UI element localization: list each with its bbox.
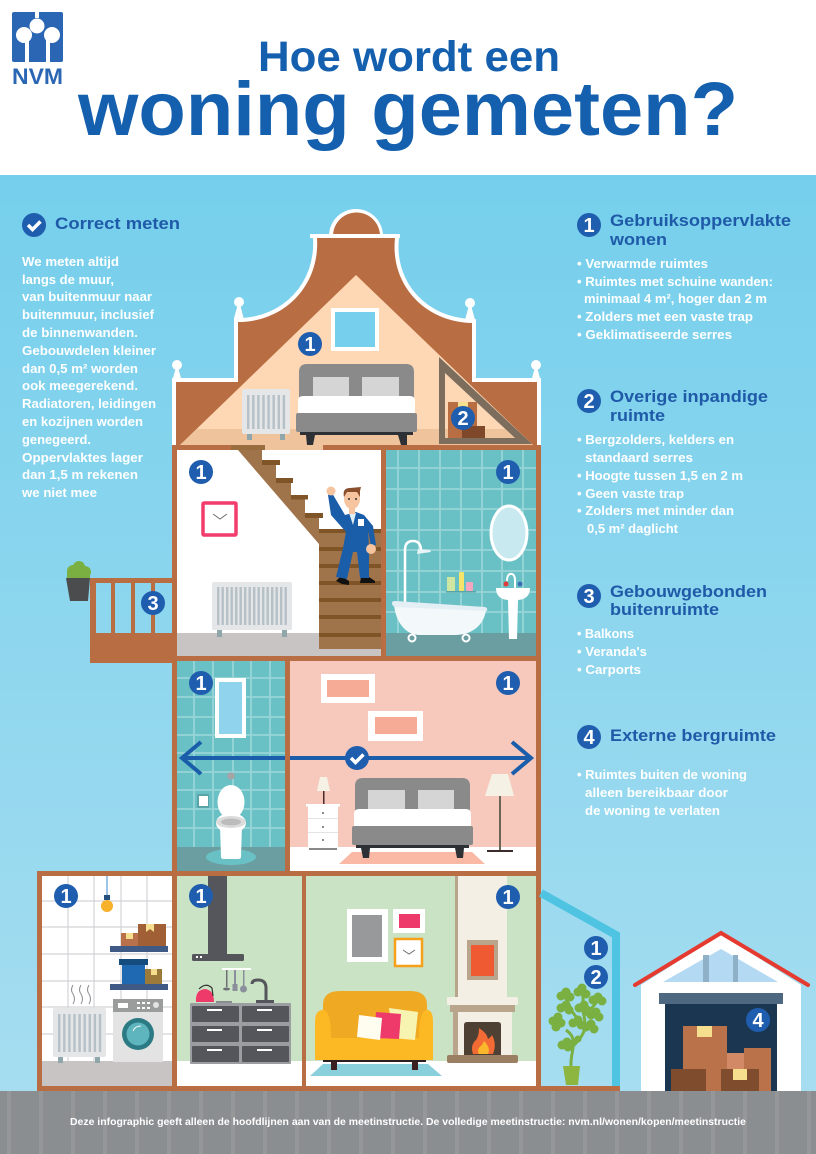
panel: legend 4 externe bergruimte (577, 725, 776, 818)
ground with footer (0, 1091, 816, 1154)
badge 4 garage (746, 1008, 770, 1032)
badge 1 laundry (54, 884, 78, 908)
list (577, 433, 743, 536)
panel: living room (306, 876, 536, 1086)
text block: correct meten: de binnenwanden. (22, 326, 138, 340)
badge 1 attic (298, 332, 322, 356)
panel: legend 2 overige inpandige ruimte (577, 387, 768, 536)
badge 1 conservatory (584, 936, 608, 960)
badge 1 toilet: 1 (195, 673, 207, 695)
staircase (238, 450, 381, 649)
text block: correct meten: we niet mee (21, 486, 97, 500)
panel: correct meten (21, 213, 180, 500)
badge 3: 3 (583, 586, 595, 608)
lower shelf with boxes (110, 959, 168, 990)
rug (310, 1064, 442, 1076)
heading: Externe bergruimte (610, 726, 776, 745)
text block: correct meten (21, 255, 156, 500)
badge 1 bedroom (496, 671, 520, 695)
logo: NVM (12, 11, 63, 89)
badge 2 (577, 389, 601, 413)
nightstand with lamp (306, 777, 340, 850)
picture frame upper (321, 674, 375, 703)
heading (610, 582, 767, 619)
text block: correct meten: dan 1,5 m rekenen (22, 468, 138, 482)
panel: legend 3 gebouwgebonden buitenruimte (577, 582, 767, 677)
heading: Gebouwgebonden (610, 582, 767, 601)
faucet (216, 980, 274, 1003)
list: • Carports (577, 663, 641, 677)
badge 4 (577, 725, 601, 749)
badge 1 bathroom: 1 (502, 462, 514, 484)
wall pictures (347, 909, 425, 966)
badge 1 conservatory: 1 (590, 938, 602, 960)
toilet paper (197, 794, 209, 808)
cushions (357, 1008, 418, 1040)
list: 0,5 m² daglicht (587, 522, 679, 536)
heading: Overige inpandige (610, 387, 768, 406)
badge 1 hallway: 1 (195, 462, 207, 484)
badge 3 (577, 584, 601, 608)
icon: check badge (22, 213, 46, 237)
measurer figure (326, 486, 376, 585)
toilet window (215, 678, 246, 738)
badge 1 hallway (189, 460, 213, 484)
mirror (491, 506, 527, 560)
badge 1 living room (496, 885, 520, 909)
text block: correct meten: genegeerd. (22, 433, 91, 447)
heading: buitenruimte (610, 600, 719, 619)
text block: correct meten: Oppervlaktes lager (22, 451, 143, 465)
text block: correct meten: langs de muur, (22, 273, 114, 287)
heading: Gebruiksoppervlakte (610, 211, 791, 230)
list: alleen bereikbaar door (585, 786, 728, 800)
picture frame lower (368, 711, 423, 741)
list: • Balkons (577, 627, 634, 641)
panel: balcony (66, 561, 177, 663)
badge 1 toilet (189, 671, 213, 695)
list (577, 768, 747, 818)
garage window (663, 949, 778, 982)
list: • Zolders met minder dan (577, 504, 734, 518)
badge 1: 1 (583, 215, 595, 237)
upper shelf with boxes (110, 924, 168, 952)
garage roof (635, 933, 808, 985)
list: • Geklimatiseerde serres (577, 328, 732, 342)
list: • Veranda's (577, 645, 647, 659)
badge 2 conservatory (584, 965, 608, 989)
badge 2 attic (451, 406, 475, 430)
wall clock (203, 503, 236, 535)
badge 2 conservatory: 2 (590, 967, 602, 989)
title (77, 33, 738, 152)
heading: correct meten: Correct meten (55, 214, 180, 233)
panel: kitchen (177, 876, 302, 1086)
list (577, 627, 647, 677)
text block: correct meten: buitenmuur, inclusief (22, 308, 155, 322)
list: • Zolders met een vaste trap (577, 310, 753, 324)
sofa (315, 991, 433, 1070)
measuring arrow (182, 742, 531, 774)
list: • Ruimtes met schuine wanden: (577, 275, 773, 289)
chimney and fireplace (447, 876, 518, 1063)
kettle (196, 985, 214, 1002)
panel: legend 1 gebruiksoppervlakte wonen (577, 211, 791, 342)
rug (339, 852, 485, 864)
title: Hoe wordt een (258, 33, 560, 81)
panel: attic gable (172, 209, 541, 447)
kitchen cabinet (190, 1003, 291, 1064)
heading (609, 211, 791, 249)
badge 2 attic: 2 (457, 408, 469, 430)
storage triangle (439, 357, 532, 444)
attic window (331, 308, 379, 351)
bathtub (392, 601, 487, 642)
storage boxes (448, 402, 485, 438)
attic interior (180, 275, 533, 445)
light bulb (101, 876, 113, 912)
footer text: Deze infographic geeft alleen de hoofdlijnen aan van de meetinstructie. De volledige meetinstructie: nvm.nl/wonen/kopen/meetinstructie (70, 1117, 746, 1128)
panel: conservatory (535, 893, 620, 1091)
text block: correct meten: van buitenmuur naar (22, 290, 152, 304)
list: • Verwarmde ruimtes (577, 257, 708, 271)
attic bed (296, 364, 417, 445)
garage body (641, 934, 801, 1091)
text block: correct meten: We meten altijd (22, 255, 119, 269)
badge 4 garage: 4 (752, 1010, 764, 1032)
house walls (37, 445, 541, 1091)
list: standaard serres (585, 451, 693, 465)
gable facade (172, 209, 541, 447)
badge 1 attic: 1 (304, 334, 316, 356)
list: • Ruimtes buiten de woning (577, 768, 747, 782)
logo: NVM: NVM (12, 64, 63, 89)
list: de woning te verlaten (585, 804, 720, 818)
panel: main bedroom (182, 661, 536, 871)
badge 1 kitchen (189, 884, 213, 908)
garage boxes (671, 1026, 771, 1091)
panel: garage (635, 933, 808, 1091)
badge 3 balcony: 3 (147, 593, 159, 615)
badge 1 kitchen: 1 (195, 886, 207, 908)
text block: correct meten: Gebouwdelen kleiner (22, 344, 156, 358)
sink (496, 574, 530, 639)
heading: wonen (609, 230, 667, 249)
plant on balcony (66, 561, 91, 601)
title: woning gemeten? (77, 67, 738, 152)
text block: correct meten: ook meegerekend. (22, 379, 138, 393)
bottles on shelf (446, 572, 476, 592)
washing machine (113, 999, 163, 1062)
badge 1 laundry: 1 (60, 886, 72, 908)
badge 1 bedroom: 1 (502, 673, 514, 695)
toilet (206, 772, 256, 865)
radiator (212, 582, 292, 637)
badge 1 living room: 1 (502, 887, 514, 909)
hanging utensils (222, 968, 251, 992)
attic radiator (242, 389, 290, 440)
extractor hood (192, 876, 244, 961)
list: minimaal 4 m², hoger dan 2 m (584, 292, 767, 306)
heading (610, 387, 768, 425)
text block: correct meten: dan 0,5 m² worden (22, 362, 138, 376)
list: • Hoogte tussen 1,5 en 2 m (577, 469, 743, 483)
panel: toilet room (177, 661, 285, 871)
bed (352, 778, 473, 858)
list: • Geen vaste trap (577, 487, 684, 501)
list (577, 257, 773, 342)
panel: bathroom (386, 450, 536, 656)
list: • Bergzolders, kelders en (577, 433, 734, 447)
heading: ruimte (610, 406, 665, 425)
badge 1 (577, 213, 601, 237)
garage door (659, 993, 783, 1091)
badge 1 bathroom (496, 460, 520, 484)
text block: correct meten: en kozijnen worden (22, 415, 143, 429)
panel: laundry room (42, 876, 172, 1086)
badge 2: 2 (583, 391, 595, 413)
badge 4: 4 (583, 727, 595, 749)
floor lamp (485, 774, 514, 852)
panel: first floor hallway with stairs (177, 450, 381, 656)
potted plant (548, 984, 606, 1085)
shower (405, 541, 431, 605)
text block: correct meten: Radiatoren, leidingen (22, 397, 156, 411)
radiator with steam (53, 985, 106, 1063)
